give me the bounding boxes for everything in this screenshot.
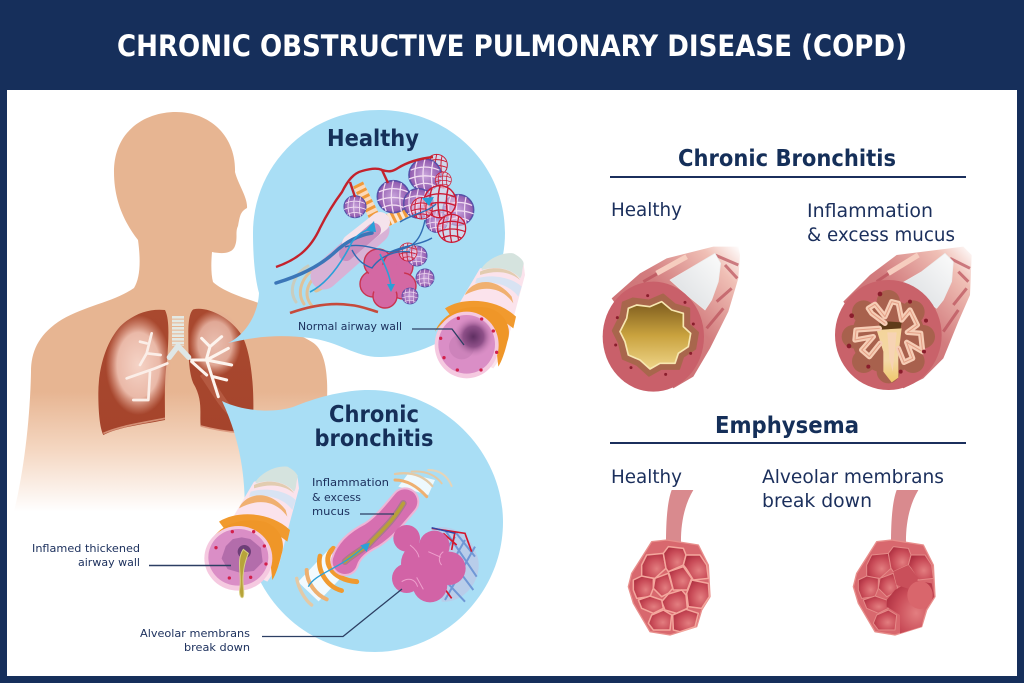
section: chronic bronchitis bbox=[610, 146, 966, 246]
tube bbox=[612, 247, 740, 388]
label: normal airway wall bbox=[298, 321, 464, 345]
label: normal airway wall: Normal airway wall bbox=[298, 321, 402, 333]
label: alveolar membrans break down: break down bbox=[184, 642, 250, 654]
label: inflamed thickened airway wall bbox=[32, 543, 231, 569]
heading: healthy: Healthy bbox=[327, 126, 419, 152]
label: alveolar membrans break down bbox=[762, 466, 944, 512]
alveolar cluster bbox=[628, 540, 710, 635]
label: alveolar membrans break down bbox=[140, 589, 402, 654]
airflow arrows bbox=[310, 197, 434, 292]
inner wall bbox=[842, 290, 935, 383]
label: alveolar membrans break down: break down bbox=[762, 490, 872, 512]
pink alveolar sac bbox=[392, 525, 466, 602]
healthy airway cross-section bbox=[435, 253, 525, 378]
section: emphysema bbox=[610, 413, 966, 512]
purple mesh on sac bbox=[399, 243, 434, 304]
inflamed lumen bbox=[223, 538, 262, 572]
airway lumen bbox=[449, 316, 494, 359]
callout bubble: chronic bronchitis bbox=[222, 390, 503, 652]
bubble shape bbox=[222, 390, 503, 652]
airway wall bbox=[204, 526, 272, 591]
inflamed airway cross-section bbox=[204, 466, 299, 598]
icon: lungs bbox=[98, 309, 253, 435]
mucosal folds bbox=[855, 302, 923, 362]
airflow arrow bbox=[308, 543, 370, 587]
label: inflammation and excess mucus: & excess mucus bbox=[807, 224, 955, 246]
red vessels bbox=[214, 530, 268, 580]
healthy alveoli bbox=[628, 490, 710, 635]
label: inflammation and excess mucus bbox=[312, 477, 394, 518]
label: inflammation and excess mucus bbox=[807, 200, 955, 246]
human body silhouette with lungs bbox=[14, 112, 330, 512]
red vessels bbox=[439, 317, 498, 372]
heading: emphysema: Emphysema bbox=[715, 413, 859, 439]
inner wall bbox=[613, 295, 698, 375]
alveoli cluster mesh bbox=[344, 154, 474, 242]
label: inflammation and excess mucus: mucus bbox=[312, 506, 350, 518]
small veins bbox=[345, 204, 436, 268]
label: inflammation and excess mucus: Inflammation bbox=[312, 477, 389, 489]
healthy bronchus bbox=[603, 247, 740, 392]
merged enlarged spaces bbox=[887, 565, 934, 633]
bubble shape bbox=[228, 110, 505, 357]
alveolar cluster bbox=[853, 540, 935, 635]
label: healthy: Healthy bbox=[611, 199, 682, 221]
lumen bbox=[620, 302, 691, 369]
sac divisions bbox=[402, 545, 443, 589]
icon: body silhouette bbox=[14, 112, 330, 512]
label: inflammation and excess mucus: & excess bbox=[312, 492, 361, 504]
inflamed airway tube bbox=[345, 502, 405, 562]
lower bronchus rings bbox=[292, 266, 330, 306]
airway wall bbox=[435, 312, 499, 378]
pale bronchus tube bbox=[324, 230, 376, 276]
tube bbox=[843, 247, 972, 388]
heading: chronic bronchitis: bronchitis bbox=[314, 426, 434, 452]
label: alveolar membrans break down: Alveolar membrans bbox=[140, 628, 250, 640]
label: healthy: Healthy bbox=[611, 466, 682, 488]
right lung bbox=[188, 309, 253, 433]
vessels bbox=[847, 292, 928, 374]
inflamed bronchus bbox=[835, 247, 972, 390]
outer wall bbox=[603, 282, 704, 392]
alveolar cells bbox=[633, 547, 709, 632]
bronchiole stem bbox=[666, 490, 693, 543]
label: alveolar membrans break down: Alveolar membrans bbox=[762, 466, 944, 488]
heading: chronic bronchitis: Chronic bbox=[329, 402, 419, 428]
lower artery bbox=[290, 304, 378, 313]
upper tube rings bbox=[395, 470, 452, 497]
left bronchial tree bbox=[127, 333, 167, 400]
vessels bbox=[614, 294, 695, 376]
airway rings bbox=[209, 466, 299, 582]
pink alveolar sac bbox=[360, 249, 416, 308]
blue mesh behind sac bbox=[432, 527, 479, 602]
heading: chronic bronchitis: Chronic Bronchitis bbox=[678, 146, 896, 172]
pulmonary artery bbox=[276, 157, 433, 267]
airway rings bbox=[435, 253, 525, 368]
inflamed tube and alveoli group bbox=[297, 470, 479, 605]
right bronchial tree bbox=[192, 337, 232, 397]
trachea bbox=[169, 316, 189, 357]
heading: chronic bronchitis bbox=[314, 402, 434, 452]
mucus column bbox=[345, 503, 403, 562]
outer wall bbox=[835, 280, 942, 390]
label: inflammation and excess mucus: Inflammation bbox=[807, 200, 933, 222]
upper bronchus rings bbox=[358, 184, 408, 226]
cartilage bbox=[902, 253, 953, 308]
left lung bbox=[98, 310, 171, 435]
lumen and mucus bbox=[877, 321, 902, 382]
intact cells bbox=[858, 547, 933, 630]
pulmonary vein bbox=[276, 233, 372, 283]
label: inflamed thickened airway wall: airway wall bbox=[78, 557, 140, 569]
cartilage bbox=[670, 253, 721, 310]
title: CHRONIC OBSTRUCTIVE PULMONARY DISEASE (COPD) bbox=[117, 29, 907, 63]
mucus strand bbox=[239, 549, 248, 598]
label: inflamed thickened airway wall: Inflamed thickened bbox=[32, 543, 140, 555]
bronchiole stem bbox=[891, 490, 918, 543]
damaged alveoli bbox=[853, 490, 935, 635]
callout bubble: healthy bbox=[228, 110, 505, 357]
lower tube rings bbox=[297, 548, 357, 605]
